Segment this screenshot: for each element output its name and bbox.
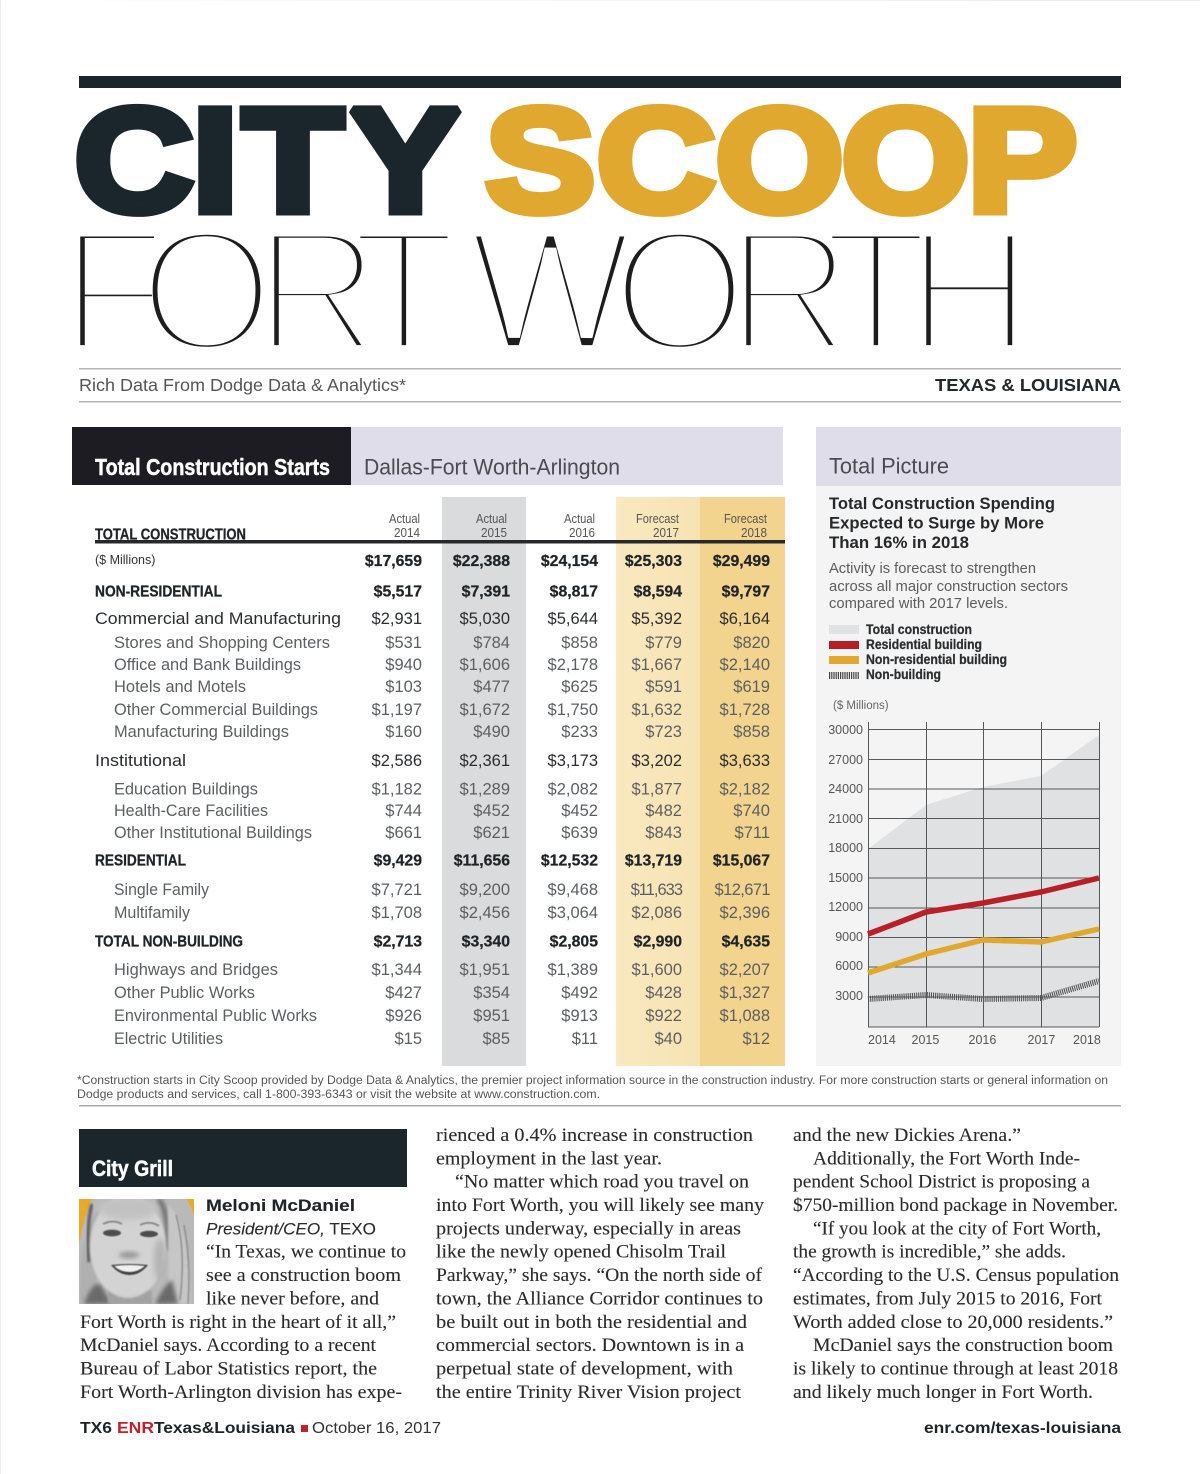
row values: details: $9,200 <box>460 881 510 899</box>
article: column 3: and likely much longer in Fort Worth. <box>793 1383 1093 1403</box>
row values: bold totals: $15,067 <box>713 852 770 870</box>
panel: city grill heading <box>79 1129 407 1187</box>
row values: details: $1,708 <box>372 904 422 922</box>
article: column 3: $750-million bond package in November. <box>793 1196 1118 1216</box>
row values: details: $2,396 <box>720 904 770 922</box>
y axis labels: 15000 <box>828 871 863 885</box>
row values: details: $1,289 <box>460 780 510 798</box>
y axis labels: 18000 <box>828 841 863 855</box>
panel subheading <box>829 495 1055 552</box>
row values: subtotals: $5,392 <box>632 610 682 628</box>
page footer: October 16, 2017 <box>312 1420 441 1437</box>
row values: details: $1,344 <box>372 961 422 979</box>
row values: bold totals: $17,659 <box>365 553 422 570</box>
row values: details: $940 <box>385 656 422 674</box>
subtitle band <box>79 368 1121 402</box>
row labels: Multifamily <box>114 904 191 922</box>
row values: details: $858 <box>561 634 598 652</box>
row values: details: $482 <box>645 802 682 820</box>
row values: details: $11 <box>572 1030 598 1048</box>
row labels: Institutional <box>95 752 186 770</box>
chart legend: Total construction <box>866 622 972 637</box>
panel heading: Total Picture <box>829 454 949 478</box>
row values: details: $452 <box>561 802 598 820</box>
row values: bold totals: $25,303 <box>625 553 682 570</box>
x axis labels: 2014 <box>868 1033 896 1047</box>
row values: subtotals: $3,633 <box>720 752 770 770</box>
article: column 2: perpetual state of development, with <box>436 1360 733 1380</box>
row values: details: $951 <box>473 1007 510 1025</box>
row values: details: $784 <box>473 634 510 652</box>
row values: details: $2,082 <box>548 780 598 798</box>
row labels: Manufacturing Buildings <box>114 723 289 741</box>
row values: bold totals: $3,340 <box>462 934 510 950</box>
page footer: ENR <box>117 1420 154 1437</box>
column headings: 2016 <box>569 526 595 540</box>
row values: bold totals: $29,499 <box>713 553 770 570</box>
row values: details: $740 <box>733 802 770 820</box>
panel: city grill heading: City Grill <box>92 1156 173 1181</box>
row values: bold totals: $11,656 <box>454 852 510 870</box>
row values: bold totals <box>365 553 770 950</box>
footnote: Dodge products and services, call 1-800-393-6343 or visit the website at www.construction.com. <box>77 1089 600 1101</box>
article: column 1: Fort Worth-Arlington division has expe- <box>80 1383 402 1403</box>
footer url: enr.com/texas-louisiana <box>924 1420 1121 1437</box>
y axis labels <box>828 723 863 1003</box>
row values: bold totals: $8,817 <box>550 584 598 600</box>
column headings <box>389 512 767 540</box>
row values: details: $103 <box>385 678 422 696</box>
article: column 2: into Fort Worth, you will likely see many <box>436 1196 765 1216</box>
line: non-residential building <box>868 929 1099 973</box>
row values: bold totals: $8,594 <box>634 584 682 600</box>
title: Fort Worth: H <box>906 194 1032 389</box>
article: column 1: Bureau of Labor Statistics report, the <box>80 1360 377 1380</box>
subtitle text: Rich Data From Dodge Data & Analytics* <box>79 375 406 395</box>
table subtitle: Dallas-Fort Worth-Arlington <box>364 454 620 480</box>
row labels: Other Commercial Buildings <box>114 701 318 719</box>
column headings: Actual <box>389 512 420 526</box>
row values: bold totals: $2,805 <box>550 934 598 950</box>
article: column 2: like the newly opened Chisolm Trail <box>436 1243 726 1263</box>
row values: details: $723 <box>645 723 682 741</box>
column headings: 2014 <box>394 526 420 540</box>
row values: bold totals: $24,154 <box>541 553 598 570</box>
title: Fort Worth: W <box>468 194 633 389</box>
row values: details: $2,456 <box>460 904 510 922</box>
row labels: Stores and Shopping Centers <box>114 634 330 652</box>
line: residential building <box>868 878 1099 934</box>
title: Fort Worth: O <box>612 194 748 389</box>
article: column 3: “According to the U.S. Census population <box>793 1266 1119 1286</box>
row labels: Health-Care Facilities <box>114 802 268 820</box>
row values: details: $354 <box>473 984 510 1002</box>
article: column 3: estimates, from July 2015 to 2016, Fort <box>793 1290 1103 1310</box>
row values: bold totals: $13,719 <box>625 852 682 870</box>
panel description: compared with 2017 levels. <box>829 595 1008 612</box>
row values: details: $492 <box>561 984 598 1002</box>
article: column 3: “If you look at the city of Fort Worth, <box>813 1219 1101 1239</box>
title: Fort Worth <box>60 194 1032 389</box>
x axis labels: 2015 <box>912 1033 939 1047</box>
row values: details: $639 <box>561 824 598 842</box>
row values: details: $1,728 <box>720 701 770 719</box>
row values: details: $619 <box>733 678 770 696</box>
row values: details: $711 <box>735 824 770 842</box>
row labels <box>95 584 341 1048</box>
row values: details: $2,182 <box>720 780 770 798</box>
article: column 3: and the new Dickies Arena.” <box>793 1126 1021 1146</box>
row labels: RESIDENTIAL <box>95 852 186 870</box>
column headings: 2018 <box>741 526 767 540</box>
title word: Scoop: SCOOP <box>485 79 1077 243</box>
y axis labels: 9000 <box>835 930 863 944</box>
column headings: Forecast <box>636 512 679 526</box>
x axis labels: 2017 <box>1028 1033 1055 1047</box>
row values: subtotals: $2,361 <box>460 752 510 770</box>
row values: bold totals: $9,429 <box>374 852 422 870</box>
row labels: Electric Utilities <box>114 1030 223 1048</box>
row values: details: $477 <box>473 678 510 696</box>
panel: total picture <box>816 427 1121 1066</box>
chart legend: Non-building <box>866 667 941 682</box>
page footer <box>80 1420 1121 1437</box>
row values: details: $1,088 <box>720 1007 770 1025</box>
row values: details: $625 <box>561 678 598 696</box>
row values: subtotals: $3,202 <box>632 752 682 770</box>
column headings: Actual <box>564 512 595 526</box>
panel subheading: Total Construction Spending <box>829 495 1055 513</box>
row values: details: $85 <box>482 1030 510 1048</box>
row values: bold totals: $9,797 <box>722 584 770 600</box>
row labels: Highways and Bridges <box>114 961 278 979</box>
row values: details: $1,606 <box>460 656 510 674</box>
byline title: President/CEO, TEXO <box>206 1219 376 1238</box>
footnote <box>77 1075 1108 1101</box>
article: column 2: be built out in both the residential and <box>436 1313 748 1333</box>
row values: details: $1,877 <box>632 780 682 798</box>
column headings: Actual <box>476 512 507 526</box>
panel subheading: Expected to Surge by More <box>829 514 1044 532</box>
column headings: Forecast <box>724 512 767 526</box>
row values: details: $661 <box>385 824 422 842</box>
row labels: TOTAL NON-BUILDING <box>95 934 243 950</box>
row labels: Office and Bank Buildings <box>114 656 301 674</box>
row values: details: $1,632 <box>632 701 682 719</box>
row values: details: $1,667 <box>632 656 682 674</box>
row values: details: $820 <box>733 634 770 652</box>
article: column 2: commercial sectors. Downtown is in a <box>436 1336 744 1356</box>
row labels: Single Family <box>114 881 210 899</box>
y axis labels: 3000 <box>835 989 863 1003</box>
chart legend <box>829 622 1007 682</box>
article: column 3 <box>793 1126 1119 1403</box>
panel subheading: Than 16% in 2018 <box>829 534 969 552</box>
x axis labels: 2018 <box>1073 1033 1101 1047</box>
row values: details: $922 <box>645 1007 682 1025</box>
row labels: Other Public Works <box>114 984 255 1002</box>
byline name: Meloni McDaniel <box>206 1196 355 1215</box>
total construction label: TOTAL CONSTRUCTION <box>95 526 246 544</box>
title: Fort Worth: R <box>254 194 380 389</box>
row values: details: $12 <box>742 1030 770 1048</box>
article: column 3: is likely to continue through at least 2018 <box>793 1360 1118 1380</box>
chart units: ($ Millions) <box>833 700 889 712</box>
line: non-building <box>868 981 1099 999</box>
column shading <box>442 497 785 1066</box>
row labels: Education Buildings <box>114 780 258 798</box>
x axis labels <box>868 1033 1101 1047</box>
row values: subtotals: $2,931 <box>372 610 422 628</box>
area: total construction <box>868 735 1099 1027</box>
row values: details: $591 <box>645 678 682 696</box>
row values: subtotals: $6,164 <box>720 610 770 628</box>
title: Fort Worth: F <box>60 194 167 389</box>
article: column 2: employment in the last year. <box>436 1149 662 1169</box>
row values: bold totals: $2,990 <box>634 934 682 950</box>
row values: details: $12,671 <box>715 881 770 899</box>
article: column 3: the growth is incredible,” she adds. <box>793 1243 1066 1263</box>
photo: Meloni McDaniel portrait <box>79 1196 194 1304</box>
row values: details: $1,600 <box>632 961 682 979</box>
row values: subtotals: $3,173 <box>548 752 598 770</box>
row values: details: $843 <box>645 824 682 842</box>
top bar <box>79 76 1121 88</box>
row values: subtotals <box>372 610 770 770</box>
row labels: NON-RESIDENTIAL <box>95 584 222 600</box>
header rule <box>95 540 785 544</box>
row values: details: $858 <box>733 723 770 741</box>
row labels: Other Institutional Buildings <box>114 824 312 842</box>
chart legend: Non-residential building <box>866 652 1007 667</box>
article: column 2: town, the Alliance Corridor continues to <box>436 1290 763 1310</box>
row values: details: $913 <box>561 1007 598 1025</box>
row values: subtotals: $5,644 <box>548 610 598 628</box>
row values: details: $428 <box>645 984 682 1002</box>
row values: details: $233 <box>561 723 598 741</box>
row values: details: $1,197 <box>372 701 422 719</box>
article: column 1: Fort Worth is right in the heart of it all,” <box>80 1313 396 1333</box>
row values: bold totals: $12,532 <box>541 852 598 870</box>
article: column 1: McDaniel says. According to a recent <box>80 1336 377 1356</box>
units label: ($ Millions) <box>95 553 155 567</box>
row values: details: $3,064 <box>548 904 598 922</box>
y axis labels: 21000 <box>828 812 863 826</box>
article: column 2: Parkway,” she says. “On the north side of <box>436 1266 763 1286</box>
page footer: Texas&Louisiana <box>154 1420 295 1437</box>
row values: subtotals: $2,586 <box>372 752 422 770</box>
article: column 2 <box>436 1126 765 1403</box>
article: column 1 <box>80 1196 406 1403</box>
row values: details: $531 <box>385 634 422 652</box>
article: column 3: pendent School District is proposing a <box>793 1173 1090 1193</box>
row values: details: $7,721 <box>372 881 422 899</box>
row labels: Environmental Public Works <box>114 1007 317 1025</box>
row values: subtotals: $5,030 <box>460 610 510 628</box>
row values: details: $621 <box>473 824 510 842</box>
column headings: 2015 <box>481 526 507 540</box>
article: column 2: rienced a 0.4% increase in construction <box>436 1126 753 1146</box>
row values: bold totals: $4,635 <box>722 934 770 950</box>
title: Fort Worth: R <box>726 194 852 389</box>
row values: bold totals: $2,713 <box>374 934 422 950</box>
row values: details: $40 <box>654 1030 682 1048</box>
row values: details: $11,633 <box>631 881 683 899</box>
table title: Total Construction Starts <box>95 454 330 480</box>
row values: details: $15 <box>394 1030 422 1048</box>
row values: details: $2,086 <box>632 904 682 922</box>
y axis labels: 6000 <box>835 959 863 973</box>
row values: details: $452 <box>473 802 510 820</box>
row values: details: $926 <box>385 1007 422 1025</box>
line chart <box>828 700 1101 1047</box>
row values: bold totals: $22,388 <box>453 553 510 570</box>
row values: details: $1,327 <box>720 984 770 1002</box>
y axis labels: 30000 <box>828 723 863 737</box>
row values: details: $160 <box>385 723 422 741</box>
row labels: Hotels and Motels <box>114 678 246 696</box>
article: column 3: McDaniel says the construction boom <box>813 1336 1114 1356</box>
article: column 1: see a construction boom <box>206 1266 402 1286</box>
row values: details: $2,178 <box>548 656 598 674</box>
row values: details: $1,750 <box>548 701 598 719</box>
article: column 3: Additionally, the Fort Worth Inde- <box>813 1149 1080 1169</box>
title: Fort Worth: O <box>138 194 275 389</box>
title: Fort Worth: T <box>822 194 929 389</box>
row values: details: $1,951 <box>460 961 510 979</box>
row values: details: $2,207 <box>720 961 770 979</box>
row values: bold totals: $5,517 <box>374 584 422 600</box>
y axis labels: 12000 <box>828 900 863 914</box>
article: column 2: the entire Trinity River Vision project <box>436 1383 742 1403</box>
article: column 3: Worth added close to 20,000 residents.” <box>793 1313 1113 1333</box>
row values: details: $779 <box>645 634 682 652</box>
x axis labels: 2016 <box>968 1033 996 1047</box>
footnote: *Construction starts in City Scoop provided by Dodge Data & Analytics, the premier project information source in the construction industry. For more construction starts or general information on <box>77 1075 1108 1087</box>
row values: details: $490 <box>473 723 510 741</box>
table header block <box>72 427 783 485</box>
row values: details: $1,672 <box>460 701 510 719</box>
row values: details: $1,182 <box>372 780 422 798</box>
row values: details: $1,389 <box>548 961 598 979</box>
row values: bold totals: $7,391 <box>462 584 510 600</box>
panel: total construction starts table <box>72 427 785 1066</box>
article: column 1: “In Texas, we continue to <box>206 1243 406 1263</box>
row values: details: $9,468 <box>548 881 598 899</box>
column headings: 2017 <box>653 526 679 540</box>
footer issue line: TX6 <box>80 1420 112 1437</box>
row values: details: $744 <box>385 802 422 820</box>
y axis labels: 27000 <box>828 753 863 767</box>
row values: details: $2,140 <box>720 656 770 674</box>
article: column 1: like never before, and <box>206 1290 380 1310</box>
title word: City: CITY <box>75 79 460 243</box>
article: column 2: “No matter which road you travel on <box>455 1173 749 1193</box>
title: Fort Worth: T <box>350 194 457 389</box>
article: column 2: projects underway, especially in areas <box>436 1219 741 1239</box>
panel description: across all major construction sectors <box>829 578 1068 595</box>
chart legend: Residential building <box>866 637 982 652</box>
row labels: Commercial and Manufacturing <box>95 610 341 628</box>
region label: TEXAS & LOUISIANA <box>935 375 1121 395</box>
row values: details <box>372 634 770 1048</box>
panel description: Activity is forecast to strengthen <box>829 560 1036 577</box>
panel description <box>829 560 1068 612</box>
title: City Scoop <box>75 79 1077 243</box>
row values: details: $427 <box>385 984 422 1002</box>
y axis labels: 24000 <box>828 782 863 796</box>
